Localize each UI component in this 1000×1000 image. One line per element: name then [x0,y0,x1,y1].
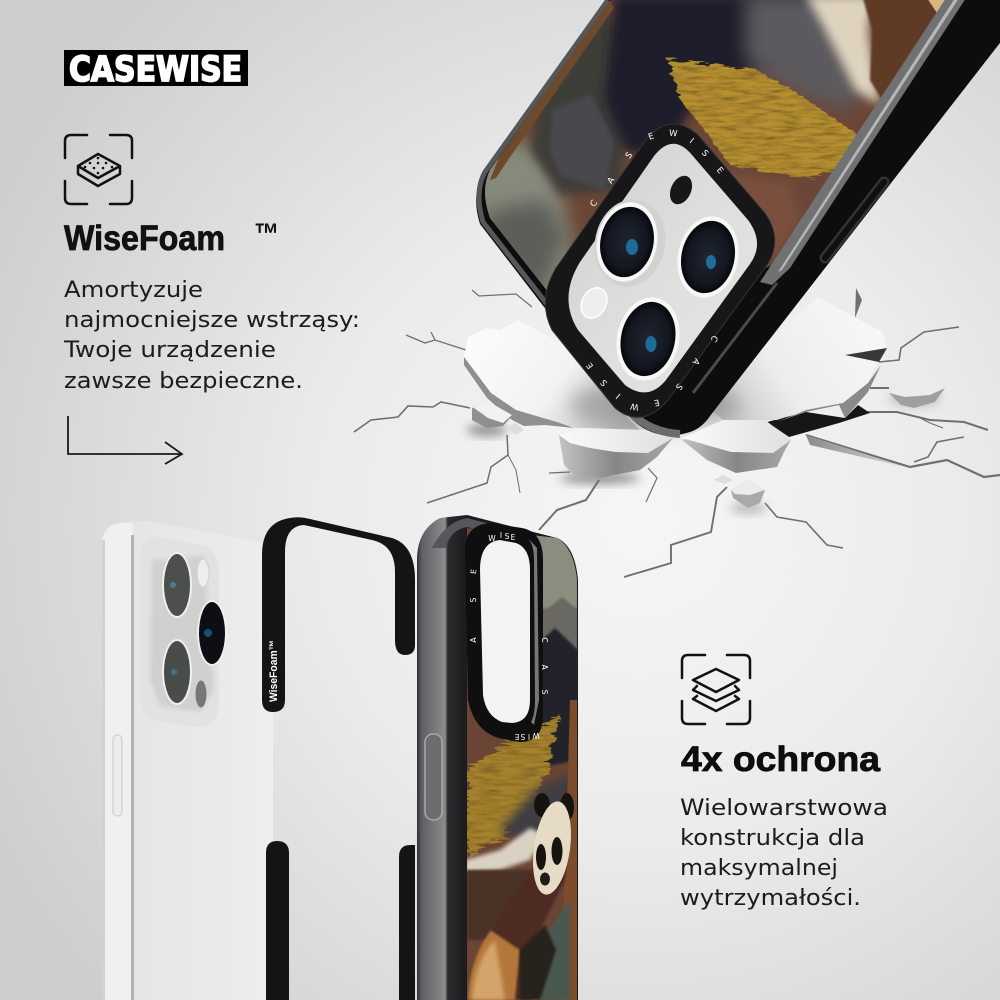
logo: CASEWISE: CASEWISE [69,50,242,90]
ring lettering: C [589,199,600,209]
ring lettering: E [647,132,656,143]
dark gap [767,405,870,437]
text block: WiseFoam description: Amortyzuje [64,277,203,303]
small sensor [666,172,696,208]
ring lettering: I [687,137,695,146]
crack shadows [889,389,941,407]
camera plate [568,144,757,392]
text block: 4x ochrona description: wytrzymałości. [680,885,861,911]
ring lettering: E [511,533,516,542]
small chunks [472,377,945,508]
flash back [197,559,209,587]
camera ring [545,124,775,417]
heading: 4x ochrona: 4x ochrona [681,740,881,779]
lens back 3 [162,639,192,705]
ring lettering: E [714,165,725,176]
text block: 4x ochrona description: konstrukcja dla [680,825,865,851]
ring lettering: W [629,400,640,412]
ring lettering: E [514,732,519,741]
text block: WiseFoam description: zawsze bezpieczne. [64,368,303,394]
text block: 4x ochrona description [680,795,888,911]
lens back 2 [197,600,227,666]
ring lettering: W [488,534,496,543]
label: WiseFoam TM on foam: WiseFoam™ [268,640,280,702]
text block: 4x ochrona description: maksymalnej [680,855,838,881]
heading: WiseFoam: ™ [254,218,279,251]
foam strip: lower left [266,841,289,1000]
ring lettering: C [540,637,549,643]
ring lettering: S [505,532,510,541]
ring lettering: E [653,396,660,407]
crack lines [354,290,1000,577]
ring lettering: S [624,150,635,161]
ring lettering: S [469,597,478,602]
phone: tilted black case [470,0,1000,435]
side button [825,182,884,258]
icon: foam pad [65,135,132,204]
artwork: side case [465,520,580,1000]
ring lettering: I [528,732,530,741]
flash [576,283,612,323]
ring lettering: W [532,731,540,740]
ring lettering: S [540,690,549,695]
foam strip: lower right [399,845,415,1000]
phone contact shadow [570,379,740,431]
center-left chunk [559,428,673,478]
ring lettering: E [585,360,596,370]
camera plateau [140,537,219,727]
text block: WiseFoam description [63,277,360,394]
text block: 4x ochrona description: Wielowarstwowa [680,795,888,821]
icon: layers [682,655,750,724]
center-right chunk [682,420,791,473]
phone: black case side view [417,515,580,1000]
camera cutout ring [465,523,549,742]
phone body [476,0,1000,435]
lens 3 [609,291,687,387]
lens 2 [670,211,746,303]
ring lettering: S [520,732,525,741]
arrow [68,416,182,464]
lens back 1 [162,552,192,618]
ring lettering: S [699,148,710,159]
ring lettering: S [673,381,684,392]
ring lettering [469,531,549,741]
ring lettering: A [469,637,478,643]
ring lettering: A [606,175,617,186]
ring lettering: A [690,356,701,367]
ring lettering: E [469,568,478,575]
foam frame: top strip [262,517,415,712]
text block: WiseFoam description: Twoje urządzenie [63,337,276,363]
right slab side [777,365,881,422]
artwork [485,0,945,290]
cracks in wall [354,288,1000,577]
panda [533,793,574,895]
text block: WiseFoam description: najmocniejsze wstrząsy: [64,307,360,333]
phone: white iPhone back [102,521,273,1000]
ring lettering [585,129,725,412]
ring lettering: I [615,391,623,400]
side button [425,734,442,820]
sensor back [196,680,206,708]
ring lettering: A [540,664,549,670]
left slab [464,320,640,430]
ring lettering: C [708,333,719,343]
heading: WiseFoam: WiseFoam [64,219,225,258]
right slab [700,297,887,420]
side bevel [102,523,133,1000]
ring lettering: I [500,531,502,540]
ring lettering: W [669,129,678,139]
light wedge [806,435,905,467]
ring lettering: S [599,377,610,388]
left slab side [464,357,574,428]
silver side stripe [760,0,968,285]
lens 1 [587,193,673,293]
side button [113,735,122,816]
